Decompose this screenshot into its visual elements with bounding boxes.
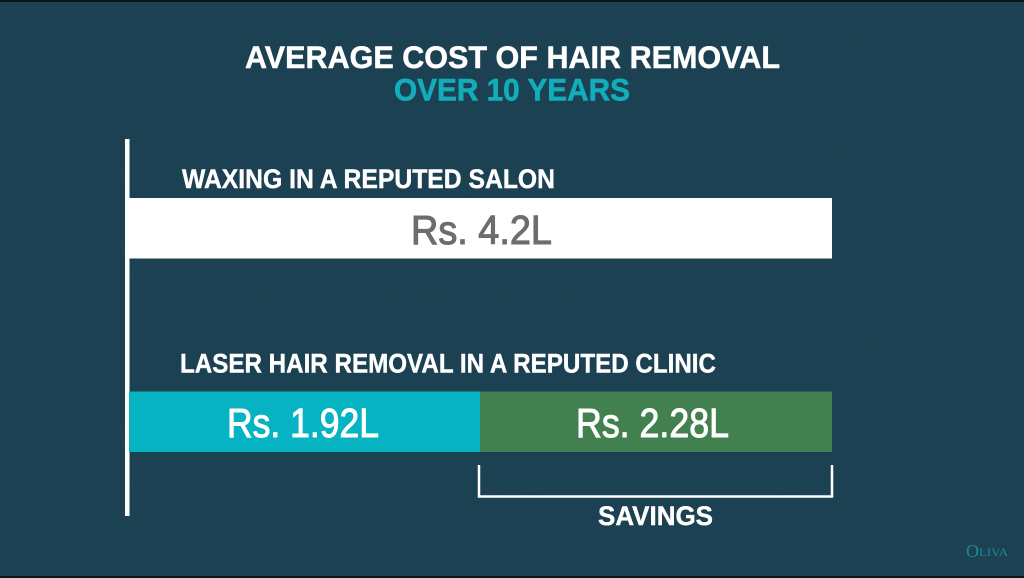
heading: waxing: WAXING IN A REPUTED SALON — [182, 164, 555, 194]
value: laser cost: Rs. 1.92L — [227, 400, 379, 446]
title — [245, 39, 780, 108]
value: waxing: Rs. 4.2L — [411, 207, 552, 253]
top video edge — [0, 0, 1024, 2]
chart axis — [125, 139, 130, 516]
heading: laser: LASER HAIR REMOVAL IN A REPUTED CLINIC — [180, 348, 716, 378]
logo: O — [966, 541, 979, 561]
subtitle: OVER 10 YEARS — [394, 72, 630, 108]
bar: waxing cost — [129, 198, 832, 258]
bar: laser cost — [129, 392, 480, 452]
bottom video edge — [0, 576, 1024, 578]
logo — [966, 541, 1008, 561]
savings bracket — [479, 465, 832, 496]
bar: savings — [480, 392, 832, 452]
title: AVERAGE COST OF HAIR REMOVAL — [245, 39, 780, 75]
savings label: SAVINGS — [598, 501, 713, 531]
logo: LIVA — [979, 545, 1008, 559]
value: savings: Rs. 2.28L — [576, 400, 729, 446]
